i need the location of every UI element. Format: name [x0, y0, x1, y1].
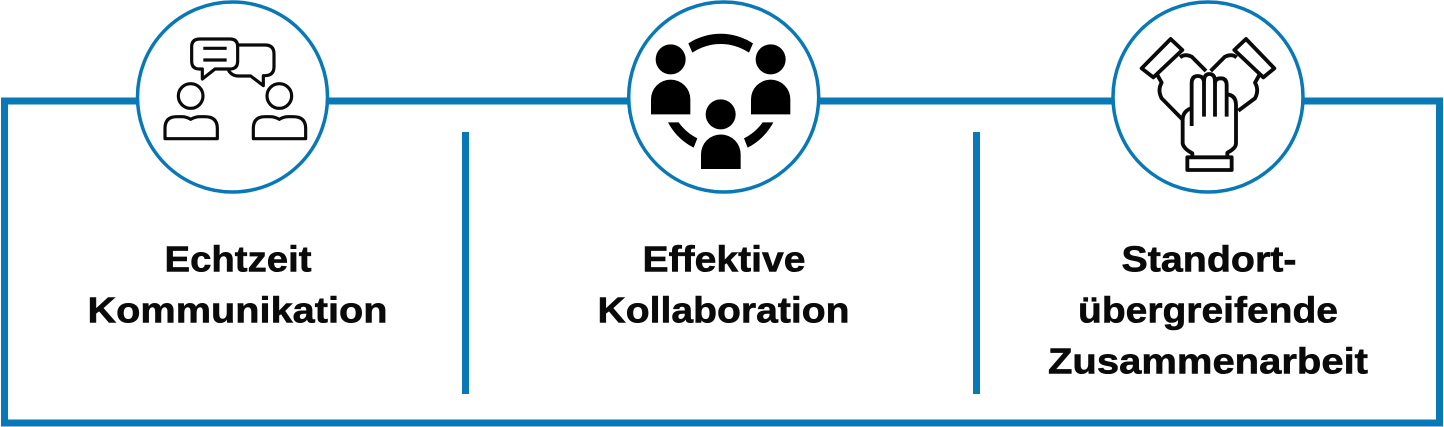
heading: Standortübergreifende Zusammenarbeit	[1048, 238, 1368, 382]
heading: Echtzeit Kommunikation: Echtzeit	[164, 238, 312, 280]
divider: right	[973, 132, 980, 394]
panel: Echtzeit Kommunikation	[88, 2, 388, 330]
heading: Effektive Kollaboration	[598, 238, 850, 330]
icon: three people in a ring	[651, 34, 790, 169]
panel: Effektive Kollaboration	[598, 2, 850, 330]
icon: stacked hands	[1142, 39, 1274, 170]
heading: Standortübergreifende Zusammenarbeit: Standort-	[1122, 238, 1296, 280]
outer frame	[4, 101, 1440, 423]
heading: Echtzeit Kommunikation	[88, 238, 388, 330]
icon circle: collaboration	[629, 2, 819, 192]
icon: two people talking	[165, 39, 306, 139]
heading: Echtzeit Kommunikation: Kommunikation	[88, 290, 388, 330]
heading: Standortübergreifende Zusammenarbeit: Zusammenarbeit	[1048, 340, 1368, 382]
icon circle: teamwork	[1113, 2, 1303, 192]
divider: left	[462, 132, 469, 394]
icon circle: communication	[138, 2, 328, 192]
panel: Standortübergreifende Zusammenarbeit	[1048, 2, 1368, 382]
heading: Effektive Kollaboration: Kollaboration	[598, 290, 850, 330]
heading: Standortübergreifende Zusammenarbeit: übergreifende	[1078, 290, 1338, 330]
heading: Effektive Kollaboration: Effektive	[642, 238, 806, 280]
